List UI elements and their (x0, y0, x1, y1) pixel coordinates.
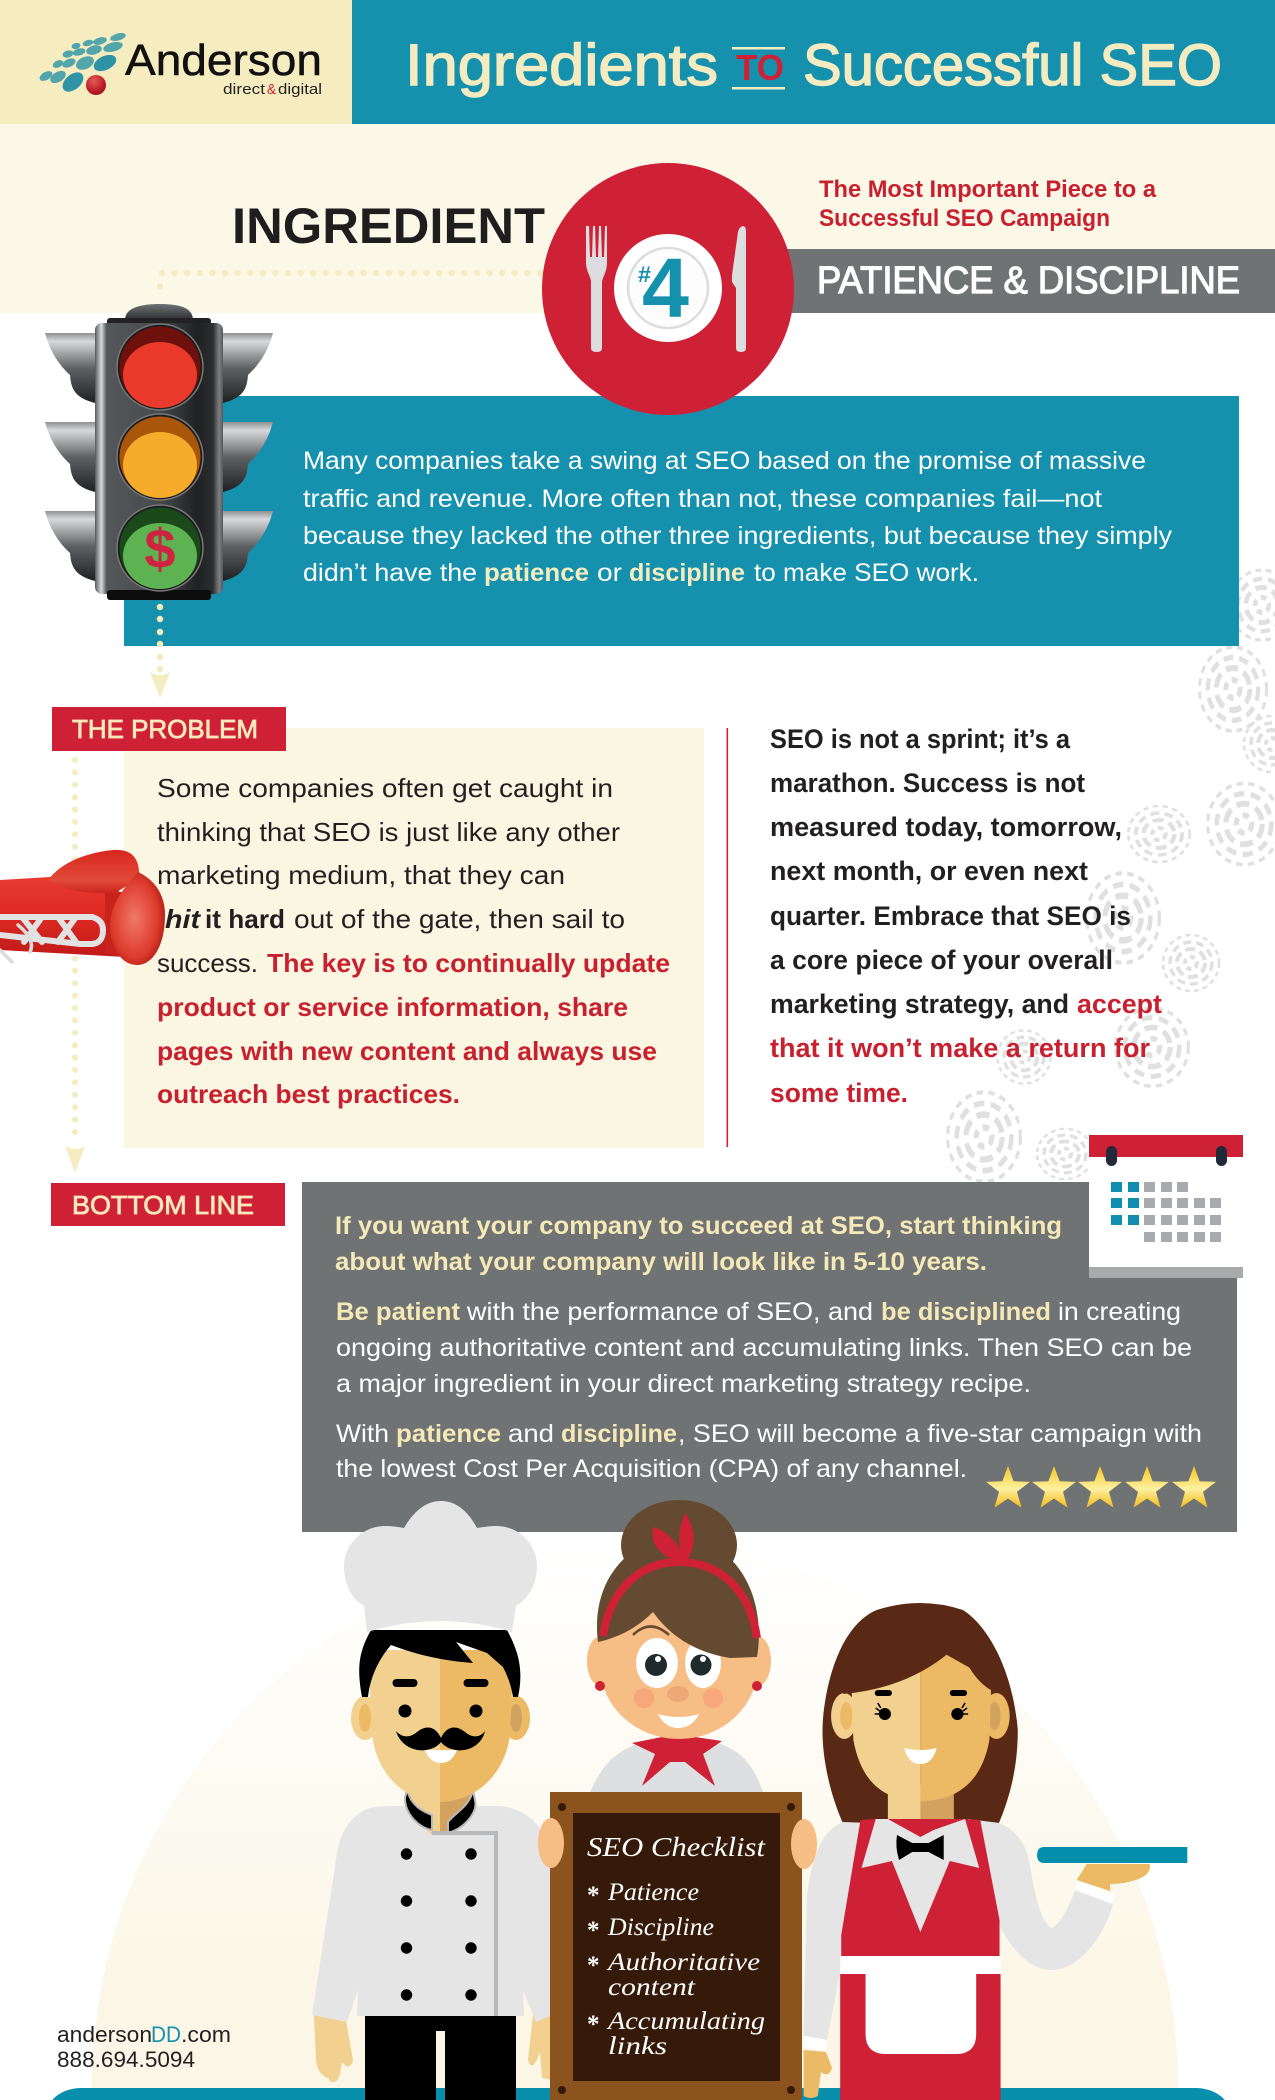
panel: intro teal box: or (597, 559, 622, 587)
panel: bottom line: in creating (1058, 1298, 1181, 1326)
tagline: The Most Important Piece to a (819, 176, 1157, 203)
tag: bottom line: BOTTOM LINE (72, 1190, 254, 1220)
panel: bottom line: discipline (561, 1420, 677, 1448)
panel: the problem: thinking that SEO is just like any other (157, 817, 620, 847)
green lamp with dollar sign: $ (144, 517, 176, 580)
icon: calendar (1089, 1135, 1243, 1278)
panel: intro teal box: Many companies take a swing at SEO based on the promise of massive (303, 447, 1146, 475)
logo dots (38, 32, 127, 95)
text block: seo is not a sprint: accept (1077, 989, 1162, 1019)
text block: seo is not a sprint: next month, or even next (770, 856, 1088, 886)
glove laces (0, 917, 103, 944)
checklist text: Authoritative (606, 1949, 760, 1976)
footer teal bar (45, 2088, 1232, 2100)
panel: the problem: Some companies often get caught in (157, 773, 613, 803)
text block: seo is not a sprint: some time. (770, 1078, 908, 1108)
header title banner (352, 0, 1275, 124)
icon: fork (586, 226, 607, 352)
icon: boxing glove (0, 850, 165, 965)
contact details (57, 2022, 231, 2072)
checklist text: * (587, 1882, 600, 1909)
chef placket (432, 1833, 496, 2016)
panel: intro teal box: didn’t have the (303, 559, 477, 587)
character: chef (312, 1501, 552, 2100)
text block: seo is not a sprint: quarter. Embrace that SEO is (770, 901, 1131, 931)
icon: tray (1037, 1847, 1187, 1863)
icon: traffic light (45, 304, 273, 600)
heading: ingredient: INGREDIENT (232, 198, 545, 254)
panel: the problem (124, 728, 704, 1148)
text block: seo is not a sprint: SEO is not a sprint; it’s a (770, 724, 1071, 754)
text block: seo is not a sprint: that it won’t make a return for (770, 1033, 1150, 1063)
hair back (823, 1603, 1018, 1824)
body (590, 1743, 763, 1792)
grey subtitle band: PATIENCE & DISCIPLINE (817, 260, 1240, 302)
divider rule (726, 728, 728, 1147)
panel: the problem: outreach best practices. (157, 1079, 460, 1109)
panel: bottom line: , SEO will become a five-star campaign with (678, 1420, 1202, 1448)
panel: bottom line: Be patient (336, 1298, 461, 1326)
background arc (92, 1544, 1178, 2100)
checklist text: SEO Checklist (587, 1832, 767, 1862)
checklist text: content (608, 1974, 696, 2001)
text block: seo is not a sprint: a core piece of your overall (770, 945, 1113, 975)
panel: bottom line: ongoing authoritative content and accumulating links. Then SEO can be (336, 1334, 1192, 1362)
panel: intro teal box (124, 396, 1239, 646)
panel: the problem: it hard (205, 904, 285, 934)
panel: bottom line: With (336, 1420, 389, 1448)
plate disc (614, 234, 722, 342)
chef buttons (401, 1848, 477, 2001)
green lamp with dollar sign (117, 505, 203, 591)
checklist text: * (587, 1952, 600, 1979)
contact details: DD (151, 2022, 181, 2047)
tagline (819, 176, 1157, 232)
text block: seo is not a sprint (770, 724, 1162, 1108)
panel: bottom line: be disciplined (881, 1298, 1051, 1326)
tag: bottom line (51, 1183, 285, 1226)
headband and bow (603, 1513, 757, 1638)
chef neck (407, 1785, 473, 1835)
header logo panel (0, 0, 352, 124)
checklist text: * (587, 1917, 600, 1944)
logo wordmark: & (267, 81, 276, 98)
head (831, 1610, 1010, 1801)
logo wordmark: digital (278, 81, 322, 98)
panel: intro teal box: traffic and revenue. More often than not, these companies fail—not (303, 485, 1102, 513)
contact details: 888.694.5094 (57, 2047, 195, 2072)
head (587, 1537, 771, 1739)
panel: bottom line: a major ingredient in your direct marketing strategy recipe. (336, 1370, 1031, 1398)
panel: bottom line: about what your company will look like in 5-10 years. (335, 1248, 987, 1276)
panel: the problem: The key is to continually update (267, 948, 670, 978)
panel: the problem: pages with new content and always use (157, 1036, 657, 1066)
character: waitress with tray (804, 1603, 1187, 2100)
chef hat (344, 1501, 537, 1632)
panel: the problem: out of the gate, then sail to (294, 904, 625, 934)
icon: five stars (986, 1466, 1216, 1508)
grey subtitle band (760, 249, 1275, 313)
panel: the problem: product or service information, share (157, 992, 628, 1022)
header title banner: TO (736, 47, 784, 88)
checklist text: Accumulating (606, 2008, 765, 2035)
scarf (632, 1737, 722, 1786)
panel: bottom line (302, 1182, 1237, 1532)
panel: bottom line: patience (396, 1420, 501, 1448)
checklist text (587, 1832, 767, 2060)
panel: bottom line: and (508, 1420, 554, 1448)
board screws (558, 1803, 795, 2094)
panel: intro teal box: to make SEO work. (754, 559, 979, 587)
logo wordmark: direct (223, 81, 266, 98)
left hand (804, 2050, 832, 2098)
logo wordmark: Anderson (125, 36, 322, 85)
panel: bottom line: with the performance of SEO, and (466, 1298, 873, 1326)
neck (888, 1785, 954, 1825)
contact details: .com (181, 2022, 231, 2047)
footprints (948, 570, 1275, 1182)
checklist text: Discipline (607, 1914, 714, 1941)
panel: the problem: success. (157, 948, 258, 978)
tag: the problem (52, 707, 286, 751)
dotted arrow: traffic light to the problem (150, 604, 170, 698)
apron (840, 1819, 1001, 2100)
chef collar (405, 1790, 475, 1833)
text block: seo is not a sprint: measured today, tomorrow, (770, 812, 1122, 842)
chef hands (314, 2015, 552, 2082)
header title banner: Successful SEO (803, 33, 1222, 98)
cuffs (804, 1880, 1114, 2051)
panel: intro teal box: discipline (629, 559, 745, 587)
shirt and arms (804, 1819, 1113, 2040)
panel: intro teal box: because they lacked the other three ingredients, but because they simply (303, 522, 1173, 550)
cream intro band (0, 124, 1275, 313)
number label: 4 (642, 241, 689, 335)
tagline: Successful SEO Campaign (819, 205, 1110, 232)
board thumbs (538, 1818, 817, 1869)
number label: # (638, 262, 651, 287)
header title banner: Ingredients (405, 33, 718, 98)
plate with cutlery and number 4 (542, 163, 794, 415)
chef head (351, 1630, 530, 1802)
collar (862, 1819, 979, 1932)
checklist text: * (587, 2011, 600, 2038)
panel: the problem: marketing medium, that they can (157, 860, 565, 890)
character: waitress with sign (587, 1500, 771, 1792)
chef jacket (312, 1806, 552, 2022)
amber lamp (117, 414, 203, 500)
checklist text: links (608, 2033, 667, 2060)
tag: the problem: THE PROBLEM (72, 714, 258, 744)
bow tie (896, 1835, 944, 1860)
red lamp (117, 324, 203, 410)
icon: knife (732, 226, 746, 352)
panel: intro teal box: patience (484, 559, 589, 587)
text block: seo is not a sprint: marathon. Success is not (770, 768, 1085, 798)
tray hand (1077, 1864, 1150, 1891)
dotted connector: plate to traffic light (158, 273, 540, 300)
text block: seo is not a sprint: marketing strategy, and (770, 989, 1069, 1019)
hair bun (621, 1500, 737, 1590)
logo red ball (86, 75, 106, 95)
chalkboard: seo checklist (538, 1792, 817, 2100)
checklist text: Patience (607, 1879, 699, 1906)
contact details: anderson (57, 2022, 152, 2047)
panel: the problem: hit (165, 904, 201, 934)
panel: bottom line: the lowest Cost Per Acquisition (CPA) of any channel. (336, 1455, 967, 1483)
chef trousers (365, 2016, 516, 2100)
dotted arrow: the problem to bottom line (65, 760, 85, 1173)
panel: bottom line: If you want your company to succeed at SEO, start thinking (335, 1212, 1062, 1240)
